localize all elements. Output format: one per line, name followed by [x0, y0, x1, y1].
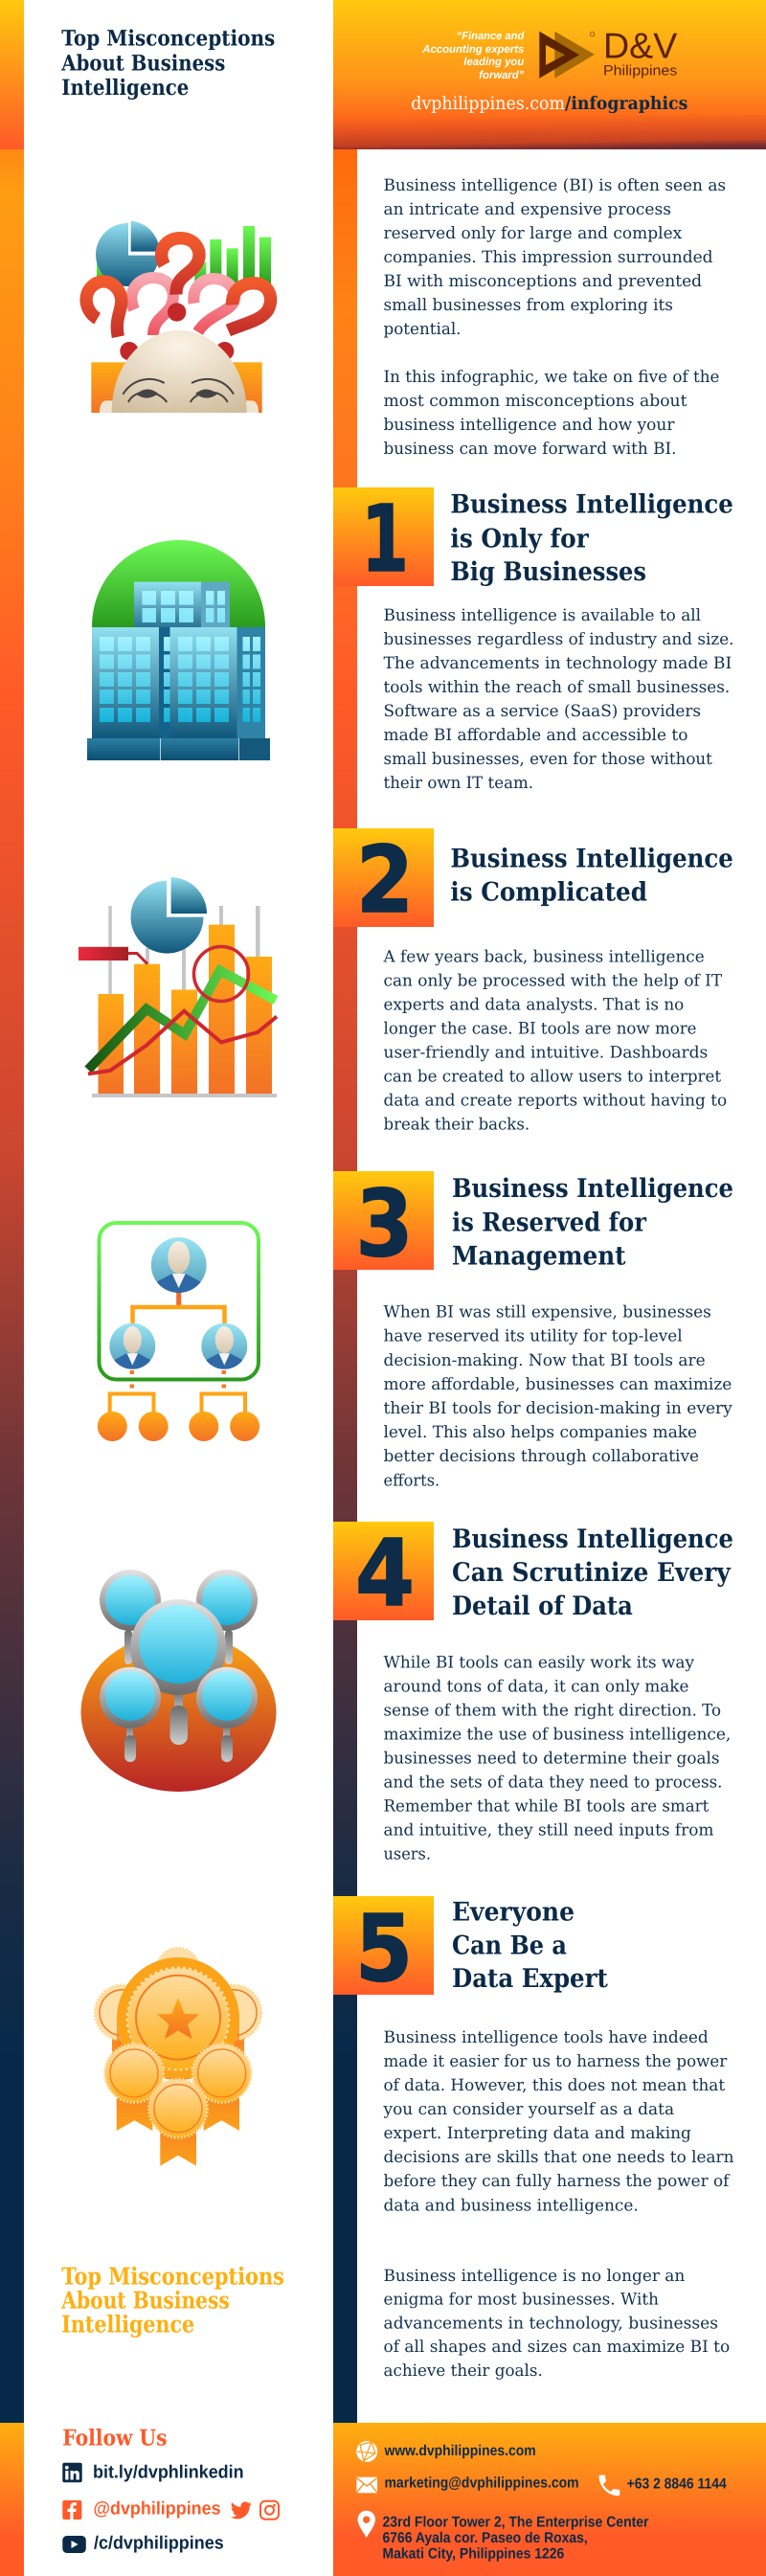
- number badge 1: 1: [361, 486, 409, 593]
- icon: youtube: [62, 2536, 86, 2553]
- left accent strip: [0, 0, 24, 2576]
- body 2: can be created to allow users to interpret: [383, 1067, 721, 1086]
- body 5: made it easier for us to harness the power: [383, 2052, 728, 2071]
- body 1: small businesses, even for those without: [383, 750, 712, 769]
- body 4: While BI tools can easily work its way: [383, 1654, 694, 1673]
- icon: twitter: [231, 2501, 252, 2519]
- body 4: around tons of data, it can only make: [383, 1678, 689, 1697]
- linkedin handle: bit.ly/dvphlinkedin: [93, 2462, 244, 2482]
- body 5: expert. Interpreting data and making: [383, 2124, 691, 2143]
- title: [60, 27, 275, 101]
- heading 5: Everyone: [452, 1898, 574, 1928]
- icon: linkedin: [62, 2463, 82, 2482]
- chart icon: bars, lines and pie: [79, 877, 277, 1097]
- address: 23rd Floor Tower 2, The Enterprise Center: [383, 2514, 649, 2530]
- body 3: their BI tools for decision-making in every: [383, 1399, 732, 1418]
- body 3: efforts.: [383, 1471, 439, 1490]
- tagline: “Finance and: [457, 31, 525, 42]
- body 2: can only be processed with the help of IT: [383, 971, 723, 990]
- body 1: businesses regardless of industry and size.: [383, 630, 733, 649]
- number badge 2: 2: [356, 826, 414, 934]
- body 1: their own IT team.: [383, 774, 533, 793]
- body 3: [383, 1303, 732, 1490]
- body 3: When BI was still expensive, businesses: [383, 1303, 711, 1322]
- number badge 2: [333, 826, 434, 934]
- heading 4: Business Intelligence: [452, 1525, 733, 1554]
- panel: misconception 4: [333, 1520, 733, 1864]
- icon: phone: [599, 2475, 620, 2496]
- logo: D&V: [603, 26, 677, 66]
- address: Makati City, Philippines 1226: [383, 2546, 565, 2563]
- body 2: [383, 948, 727, 1134]
- medal icon: [95, 1948, 261, 2166]
- center accent strip: [333, 149, 357, 2423]
- body 2: experts and data analysts. That is no: [383, 996, 684, 1015]
- body 3: level. This also helps companies make: [383, 1423, 697, 1442]
- title: Intelligence: [61, 76, 189, 101]
- panel: misconception 2: [333, 826, 733, 1134]
- body 3: decision-making. Now that BI tools are: [383, 1351, 706, 1370]
- body 4: and the sets of data they need to process.: [383, 1774, 722, 1793]
- heading 4: Can Scrutinize Every: [452, 1558, 732, 1588]
- icon: instagram: [260, 2501, 279, 2520]
- panel: misconception 3: [333, 1170, 733, 1490]
- body 5: before they can fully harness the power of: [383, 2172, 731, 2191]
- body 4: users.: [383, 1845, 431, 1864]
- body 2: data and create reports without having to: [383, 1092, 727, 1111]
- left closing heading: About Business: [60, 2287, 230, 2314]
- intro text: most common misconceptions about: [383, 392, 687, 411]
- body 5: of data. However, this does not mean that: [383, 2076, 725, 2095]
- footer: follow us: [62, 2425, 279, 2554]
- panel: misconception 1: [333, 486, 733, 793]
- heading 1: is Only for: [450, 524, 590, 554]
- intro text: an intricate and expensive process: [383, 200, 671, 219]
- heading 4: Detail of Data: [452, 1592, 633, 1621]
- body 4: maximize the use of business intelligence,: [383, 1726, 731, 1745]
- network icon: connected nodes: [80, 1570, 276, 1792]
- header panel: [333, 0, 766, 149]
- number badge 5: 5: [355, 1895, 413, 2002]
- body 3: more affordable, businesses can maximize: [383, 1375, 732, 1394]
- conclusion text: advancements in technology, businesses: [383, 2314, 718, 2333]
- body 1: tools within the reach of small businesses.: [383, 678, 730, 697]
- heading 2: Business Intelligence: [450, 844, 733, 873]
- body 2: longer the case. BI tools are now more: [383, 1019, 697, 1038]
- icon: globe: [356, 2441, 377, 2462]
- body 5: [383, 2028, 734, 2216]
- intro text: small businesses from exploring its: [383, 296, 673, 315]
- body 4: Remember that while BI tools are smart: [383, 1797, 709, 1817]
- heading 1: Big Businesses: [450, 557, 646, 587]
- logo: Philippines: [603, 62, 677, 79]
- intro text: [383, 176, 726, 459]
- phone number: +63 2 8846 1144: [627, 2476, 727, 2493]
- website link: [411, 94, 687, 114]
- conclusion text: achieve their goals.: [383, 2361, 543, 2381]
- body 3: better decisions through collaborative: [383, 1447, 699, 1466]
- panel: misconception 5: [333, 1895, 734, 2216]
- body 1: The advancements in technology made BI: [383, 654, 732, 673]
- number badge 5: [333, 1895, 434, 2002]
- heading 1: Business Intelligence: [450, 490, 733, 520]
- youtube handle: /c/dvphilippines: [94, 2534, 224, 2554]
- website link: dvphilippines.com: [411, 94, 565, 114]
- body 5: Business intelligence tools have indeed: [383, 2028, 709, 2047]
- body 4: sense of them with the right direction. To: [383, 1702, 721, 1721]
- tagline: leading you: [463, 56, 524, 68]
- intro text: companies. This impression surrounded: [383, 248, 713, 267]
- intro illustration: head with question marks: [86, 221, 271, 413]
- intro text: Business intelligence (BI) is often seen as: [383, 176, 726, 195]
- body 4: [383, 1654, 731, 1864]
- address: [383, 2514, 649, 2563]
- tagline: [421, 31, 525, 81]
- address: 6766 Ayala cor. Paseo de Roxas,: [383, 2530, 588, 2546]
- body 5: decisions are skills that one needs to learn: [383, 2148, 734, 2167]
- intro text: reserved only for large and complex: [383, 224, 683, 243]
- icon: location pin: [358, 2511, 375, 2538]
- heading 3: Business Intelligence: [452, 1174, 733, 1204]
- conclusion text: Business intelligence is no longer an: [383, 2267, 685, 2286]
- website: www.dvphilippines.com: [384, 2443, 536, 2459]
- conclusion text: [383, 2267, 730, 2381]
- heading 1: [450, 490, 733, 587]
- body 5: you can consider yourself as a data: [383, 2100, 674, 2119]
- title: About Business: [60, 51, 225, 76]
- tagline: Accounting experts: [421, 44, 524, 56]
- heading 5: Can Be a: [452, 1932, 567, 1961]
- intro text: BI with misconceptions and prevented: [383, 272, 702, 291]
- heading 5: Data Expert: [452, 1964, 608, 1994]
- conclusion text: enigma for most businesses. With: [383, 2291, 659, 2310]
- heading 3: is Reserved for: [452, 1209, 647, 1238]
- number badge 4: 4: [355, 1520, 415, 1627]
- conclusion text: of all shapes and sizes can maximize BI to: [383, 2338, 730, 2357]
- body 1: Software as a service (SaaS) providers: [383, 702, 701, 721]
- left closing heading: Intelligence: [61, 2311, 194, 2339]
- org chart icon: [98, 1223, 259, 1441]
- heading 5: [452, 1898, 608, 1994]
- icon: mail: [356, 2477, 377, 2493]
- body 4: businesses need to determine their goals: [383, 1750, 720, 1769]
- heading 2: is Complicated: [450, 878, 647, 908]
- body 2: user-friendly and intuitive. Dashboards: [383, 1044, 708, 1063]
- intro text: business intelligence and how your: [383, 416, 675, 435]
- body 3: have reserved its utility for top-level: [383, 1327, 683, 1346]
- website link: /infographics: [565, 94, 687, 114]
- number badge 4: [333, 1520, 434, 1627]
- follow us heading: Follow Us: [62, 2425, 167, 2451]
- body 1: made BI affordable and accessible to: [383, 726, 687, 745]
- intro text: potential.: [383, 320, 462, 339]
- body 2: break their backs.: [383, 1115, 529, 1134]
- intro text: In this infographic, we take on five of the: [383, 368, 720, 387]
- icon: office buildings: [87, 540, 270, 760]
- heading 3: Management: [452, 1242, 626, 1272]
- body 2: A few years back, business intelligence: [383, 948, 705, 967]
- logo: [539, 26, 677, 79]
- heading 4: [452, 1525, 733, 1621]
- title: Top Misconceptions: [61, 27, 275, 52]
- footer: contact panel: [333, 2423, 766, 2576]
- body 1: Business intelligence is available to all: [383, 606, 701, 625]
- number badge 1: [333, 486, 434, 593]
- email: marketing@dvphilippines.com: [385, 2475, 579, 2492]
- tagline: forward”: [479, 70, 525, 81]
- number badge 3: [333, 1170, 434, 1277]
- number badge 3: 3: [356, 1170, 414, 1277]
- facebook handle: @dvphilippines: [94, 2499, 221, 2520]
- body 5: data and business intelligence.: [383, 2197, 639, 2216]
- heading 3: [452, 1174, 733, 1272]
- left closing heading: [60, 2263, 284, 2339]
- body 1: [383, 606, 733, 793]
- icon: facebook: [62, 2500, 81, 2520]
- left closing heading: Top Misconceptions: [61, 2263, 284, 2291]
- heading 2: [450, 844, 733, 908]
- body 4: and intuitive, they still need inputs from: [383, 1821, 713, 1841]
- intro text: business can move forward with BI.: [383, 440, 676, 459]
